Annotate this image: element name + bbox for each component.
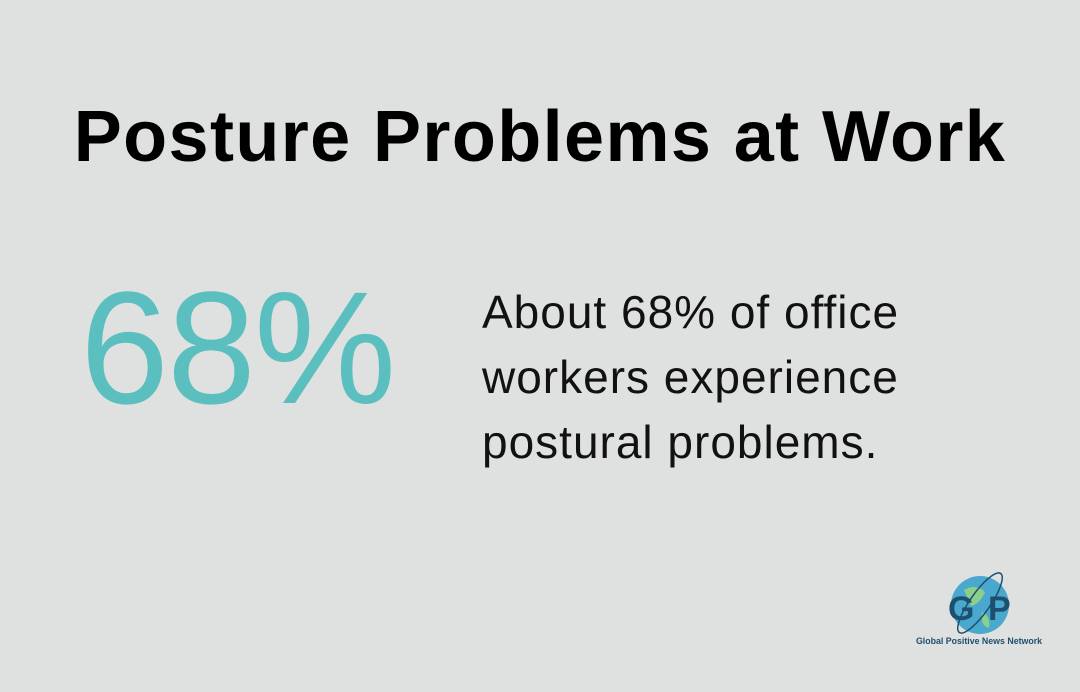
logo: P [988, 590, 1011, 628]
logo: Global Positive News Network [916, 636, 1042, 646]
title: Posture Problems at Work [74, 97, 1006, 177]
description text: postural problems. [482, 416, 878, 468]
big number: 68% [80, 258, 394, 437]
logo: G [948, 590, 974, 628]
description text: About 68% of office [482, 286, 899, 338]
description text: workers experience [482, 351, 899, 403]
description text [482, 286, 899, 468]
logo [916, 572, 1042, 646]
